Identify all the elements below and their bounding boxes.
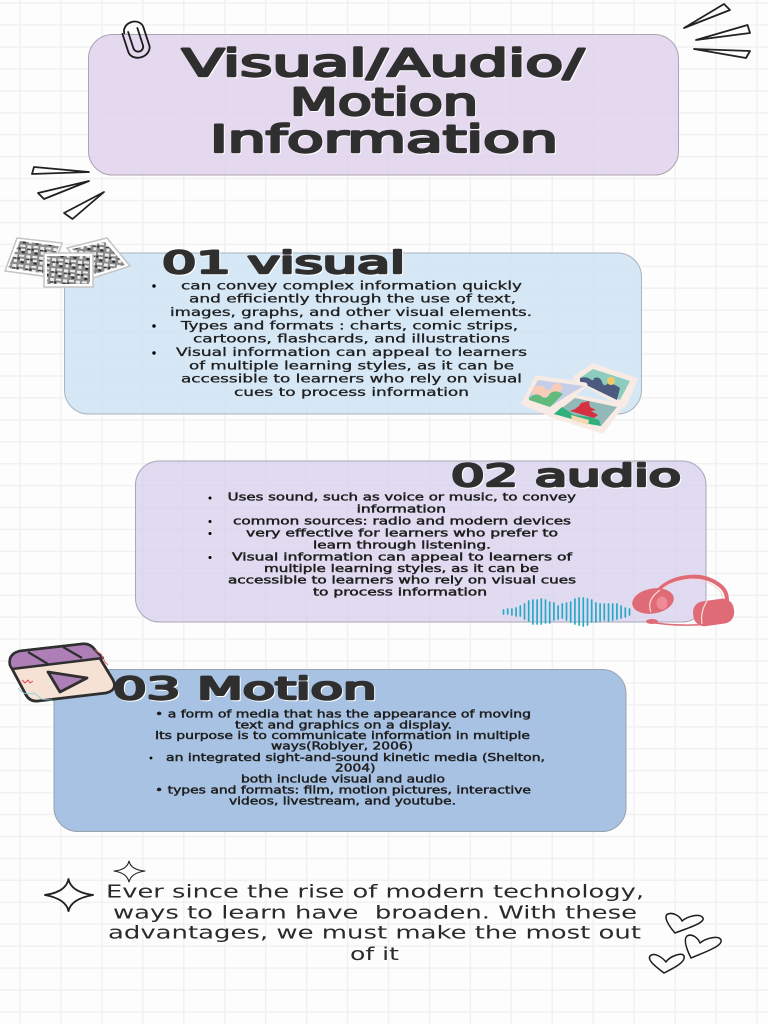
text block: visual bullets: and efficiently through the use of text, — [189, 292, 516, 306]
text block: audio bullets — [208, 492, 576, 599]
icon: large sparkle — [45, 879, 93, 911]
heading: 03 Motion: 03 Motion — [113, 672, 376, 707]
icon: video player — [10, 644, 114, 701]
text block: motion bullets: Its purpose is to communicate information in multiple — [155, 730, 530, 742]
text block: audio bullets: multiple learning styles, as it can be — [264, 563, 539, 575]
text block: closing statement: of it — [350, 944, 399, 965]
panel: 02 audio — [136, 459, 706, 622]
text block: audio bullets: very effective for learners who prefer to — [246, 527, 558, 539]
text block: visual bullets: cartoons, flashcards, and illustrations — [193, 332, 510, 346]
icon: sound wave — [504, 598, 630, 626]
text block: visual bullets: Visual information can appeal to learners — [176, 345, 527, 359]
text block: audio bullets: Visual information can appeal to learners of — [232, 551, 572, 563]
text block: audio bullets: to process information — [313, 587, 487, 599]
text block: motion bullets: • types and formats: film, motion pictures, interactive — [155, 785, 531, 797]
panel: 01 visual — [64, 246, 642, 414]
text block: motion bullets: • a form of media that has the appearance of moving — [155, 709, 531, 721]
text block: motion bullets: videos, livestream, and youtube. — [229, 795, 456, 807]
text block: visual bullets: accessible to learners who rely on visual — [181, 372, 522, 386]
title: Visual/Audio/ — [182, 42, 585, 85]
panel: title — [88, 34, 678, 175]
text block: audio bullets: learn through listening. — [313, 539, 491, 551]
text block: audio bullets: accessible to learners who rely on visual cues — [228, 574, 576, 586]
text block: visual bullets: cues to process information — [234, 385, 469, 399]
icon: hearts — [649, 913, 721, 973]
text block: closing statement: ways to learn have broaden. With these — [113, 902, 637, 923]
title: Information — [210, 118, 558, 161]
title — [182, 42, 585, 161]
text block: audio bullets: information — [357, 503, 446, 515]
icon: photo cards — [524, 366, 635, 431]
panel: 03 motion — [54, 670, 626, 832]
text block: visual bullets: images, graphs, and other visual elements. — [170, 305, 532, 319]
text block: audio bullets: common sources: radio and modern devices — [233, 516, 571, 528]
icon: headphones — [630, 577, 736, 628]
text block: motion bullets: an integrated sight-and-sound kinetic media (Shelton, — [166, 752, 545, 764]
icon: comic strip sheets — [5, 238, 130, 287]
text block: closing statement — [106, 881, 644, 965]
text block: visual bullets: can convey complex information quickly — [181, 278, 522, 292]
icon: sparks left — [32, 167, 104, 219]
text block: visual bullets — [152, 278, 532, 399]
icon: small sparkle — [114, 861, 145, 882]
heading: 01 visual: 01 visual — [162, 246, 405, 281]
text block: closing statement: Ever since the rise of modern technology, — [106, 881, 644, 902]
heading: 02 audio: 02 audio — [451, 459, 681, 494]
icon: sparks top right — [684, 4, 750, 58]
text block: motion bullets: both include visual and audio — [241, 774, 445, 786]
text block: audio bullets: Uses sound, such as voice or music, to convey — [228, 492, 576, 504]
title: Motion — [290, 81, 478, 124]
text block: visual bullets: Types and formats : charts, comic strips, — [180, 318, 518, 332]
text block: visual bullets: of multiple learning styles, as it can be — [189, 358, 514, 372]
text block: motion bullets: ways(Roblyer, 2006) — [271, 741, 413, 753]
text block: motion bullets — [150, 709, 545, 807]
icon: paperclip — [120, 19, 152, 61]
text block: motion bullets: 2004) — [335, 763, 376, 775]
text block: closing statement: advantages, we must make the most out — [108, 923, 641, 944]
text block: motion bullets: text and graphics on a display. — [235, 719, 452, 731]
